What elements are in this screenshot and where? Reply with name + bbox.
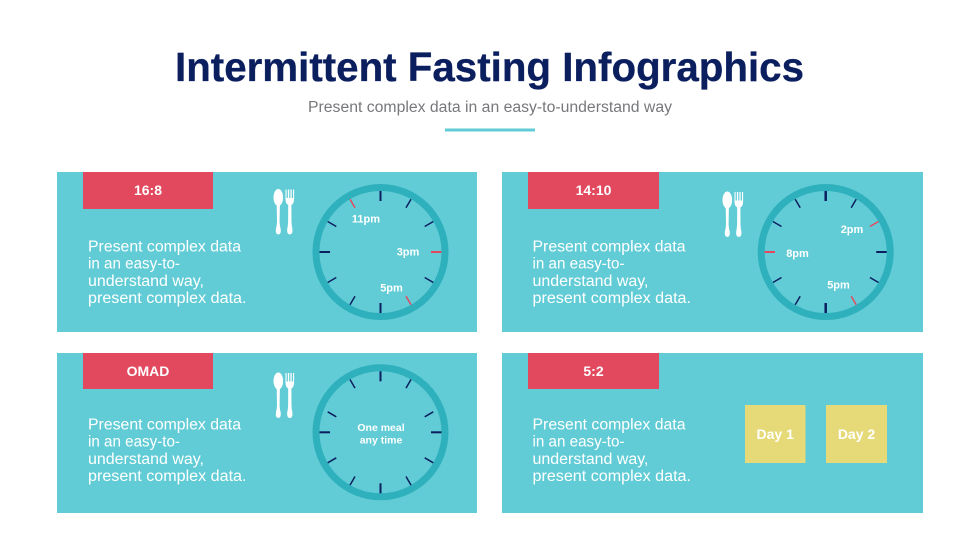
clock: 16:8: 5pm — [380, 282, 403, 294]
description text: present complex data. — [88, 290, 246, 307]
panel: 5:2 — [502, 353, 923, 513]
icon: spoon and fork — [274, 372, 294, 418]
box: Day 1 — [745, 405, 806, 463]
panel: 14:10 — [502, 172, 923, 332]
title underline accent — [445, 128, 535, 132]
panel: OMAD — [57, 353, 477, 513]
icon: spoon and fork — [274, 189, 294, 234]
box: Day 2: Day 2 — [838, 426, 875, 442]
description text — [88, 238, 246, 307]
description text: in an easy-to- — [532, 434, 624, 451]
description text: in an easy-to- — [88, 434, 180, 451]
description text: understand way, — [532, 273, 648, 290]
subtitle: Present complex data in an easy-to-understand way — [308, 99, 672, 116]
clock: 16:8: 11pm — [352, 214, 380, 226]
panel: 16:8 — [57, 172, 477, 332]
description text: Present complex data — [88, 416, 241, 434]
header tab: OMAD: OMAD — [127, 363, 169, 379]
description text: present complex data. — [88, 468, 246, 485]
description text: in an easy-to- — [88, 256, 180, 273]
description text — [532, 238, 691, 307]
title: Intermittent Fasting Infographics — [175, 44, 804, 90]
description text: Present complex data — [532, 416, 686, 434]
clock: OMAD: any time — [360, 434, 402, 446]
clock: 14:10: 8pm — [786, 248, 809, 260]
description text: present complex data. — [532, 468, 691, 485]
description text: understand way, — [532, 451, 648, 468]
box: Day 1: Day 1 — [757, 426, 794, 442]
icon: spoon and fork — [722, 192, 743, 237]
clock: 14:10 — [761, 188, 890, 316]
header tab: 14:10 — [528, 172, 659, 209]
header tab: 5:2: 5:2 — [583, 363, 604, 379]
header tab: 14:10: 14:10 — [576, 182, 612, 198]
description text: understand way, — [88, 451, 204, 468]
clock: 16:8: 3pm — [397, 246, 420, 258]
description text: present complex data. — [532, 290, 691, 307]
description text — [532, 416, 691, 485]
box: Day 2 — [826, 405, 887, 463]
description text: understand way, — [88, 273, 204, 290]
header tab: 16:8 — [83, 172, 213, 209]
description text: Present complex data — [88, 238, 241, 256]
clock: OMAD — [316, 368, 445, 497]
clock: 16:8 — [316, 188, 445, 316]
header tab: 5:2 — [528, 353, 659, 389]
description text: Present complex data — [532, 238, 686, 256]
header tab: 16:8: 16:8 — [134, 182, 162, 198]
clock: OMAD: One meal — [357, 422, 405, 434]
clock: 14:10: 2pm — [841, 224, 864, 236]
header tab: OMAD — [83, 353, 213, 389]
description text: in an easy-to- — [532, 256, 624, 273]
clock: 14:10: 5pm — [827, 280, 850, 292]
description text — [88, 416, 246, 485]
